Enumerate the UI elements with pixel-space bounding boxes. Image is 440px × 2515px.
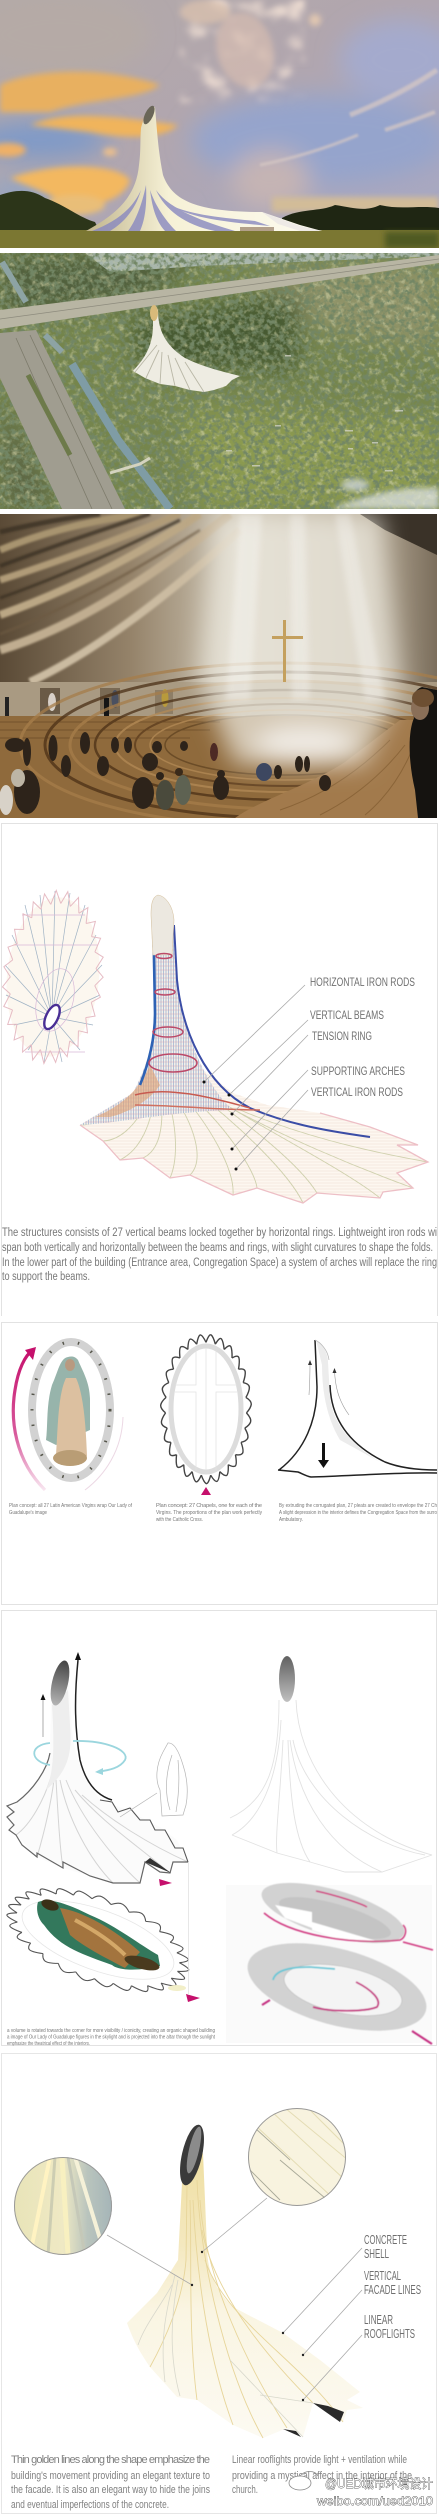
oculus (41, 1003, 63, 1031)
virgin plan perspective (0, 1862, 204, 2014)
right trees (282, 205, 439, 232)
pink arrow (13, 1350, 45, 1490)
grey crease lines (138, 2275, 313, 2437)
light streaks (226, 514, 385, 700)
corrugated outline (160, 1333, 252, 1484)
weibo watermark: @UED城市环境设计 (325, 2476, 433, 2491)
oculus (47, 1659, 73, 1707)
caption: Ambulatory. (279, 1517, 303, 1523)
wall niches (40, 688, 173, 714)
leader dots (191, 2251, 304, 2401)
pink triangle (201, 1487, 211, 1495)
black curve arrow (76, 1660, 112, 1800)
pink flag (159, 1879, 172, 1886)
caption: emphasize the theatrical effect of the interiors. (7, 2041, 90, 2047)
panel: exterior sunset photo (0, 0, 440, 248)
panel: form and plan diagrams (0, 1610, 437, 2048)
caption (7, 2028, 215, 2047)
arrow heads (308, 1360, 336, 1373)
head (40, 1897, 60, 1913)
up arrows (309, 1362, 349, 1415)
distant buildings (272, 197, 439, 212)
yellow glow (168, 1985, 186, 1991)
small head (40, 1694, 46, 1700)
wooden ramp (235, 720, 420, 818)
tower folds (230, 1700, 432, 1872)
caption: with the Catholic Cross. (155, 1517, 203, 1523)
blue route (273, 1967, 335, 1980)
virgin outline sketch (120, 1743, 187, 1817)
under shadow (145, 1858, 171, 1873)
church aerial (133, 306, 240, 392)
caption: a volume is rotated towards the corner for more visibility / iconicity, creating an organic shaped building (7, 2028, 215, 2034)
right profile (330, 1385, 437, 1470)
inner court (275, 1889, 395, 1947)
structure paragraph: to support the beams. (2, 1271, 90, 1283)
right description (232, 2454, 412, 2496)
roof oval (256, 1870, 410, 1956)
rim (248, 2108, 346, 2206)
panel: plan concept diagrams (2, 1322, 438, 1604)
ceiling shadows (0, 514, 200, 634)
tree canopy (0, 253, 439, 509)
ceiling folds (0, 514, 240, 682)
blue sky areas (0, 0, 440, 210)
ring head (95, 1768, 103, 1775)
pink route (264, 1891, 433, 1950)
left description: building's movement providing an elegant texture to (11, 2470, 210, 2482)
weibo watermark (316, 2476, 433, 2508)
caption: Plan concept: all 27 Latin American Virgins wrap Our Lady of (9, 1503, 132, 1509)
leader lines (107, 2198, 362, 2400)
oculus highlights (184, 2125, 204, 2175)
structure labels (310, 975, 415, 1099)
inner oval (280, 1955, 406, 2025)
disc (14, 2157, 112, 2255)
structure wireframe (80, 895, 428, 1203)
caption: a image of Our Lady of Guadalupe figures in the skylight and is projected into the altar through the sunlight (7, 2034, 215, 2040)
structure labels: VERTICAL IRON RODS (311, 1085, 403, 1099)
caption (9, 1503, 132, 1516)
panel frame (2, 1610, 436, 2046)
panel: aerial site photo (0, 253, 439, 509)
material labels: SHELL (364, 2247, 389, 2261)
church folds (92, 185, 270, 231)
detail circle left (14, 2157, 112, 2255)
left description: Thin golden lines along the shape emphasize the (11, 2454, 210, 2466)
highway (0, 330, 125, 509)
disc folds (30, 2157, 105, 2255)
ground field (0, 253, 439, 509)
structure paragraph (2, 1227, 437, 1283)
rim (14, 2158, 112, 2254)
fan ribs (80, 1075, 428, 1203)
far haze (85, 253, 439, 272)
upper zigzag (100, 1800, 188, 1862)
pink flag (186, 1994, 200, 2002)
extrusion concept (278, 1340, 437, 1523)
ground (0, 230, 439, 248)
left description (11, 2454, 210, 2511)
cross (175, 1348, 237, 1470)
left description: and eventual imperfections of the concrete. (11, 2499, 169, 2511)
flare colour (95, 1065, 160, 1117)
roof plan (256, 1870, 433, 1956)
ceiling (0, 514, 437, 682)
church oculus (143, 106, 155, 124)
floor plan (238, 1926, 436, 2048)
dark upper right (360, 514, 437, 555)
forest texture (0, 253, 439, 509)
panel: interior worship photo (0, 514, 440, 827)
structure labels: VERTICAL BEAMS (310, 1008, 384, 1022)
orange clouds (0, 72, 178, 215)
fan surface (80, 1060, 428, 1203)
dots and leader lines (204, 985, 308, 1169)
disc lines (255, 2108, 350, 2200)
weibo logo (289, 2472, 318, 2490)
caption: Plan concept: 27 Chapels, one for each of the (156, 1503, 262, 1509)
virgin plan concept (9, 1342, 132, 1516)
detail circle right (248, 2108, 350, 2206)
tower mesh (80, 895, 233, 1125)
dark creases (250, 2128, 325, 2200)
rotation ring (34, 1741, 126, 1772)
inner oval (171, 1346, 241, 1472)
angel at foot (123, 1953, 161, 1973)
tower body (127, 2153, 363, 2438)
tower folds (16, 1770, 188, 1883)
panel: materials diagram (2, 2054, 436, 2514)
faint white tower (230, 1656, 432, 1872)
cross (272, 620, 303, 682)
regional tone (0, 253, 439, 509)
pink entries (262, 2000, 432, 2044)
church tip (150, 305, 158, 321)
chapels plan concept (155, 1333, 262, 1523)
median strip (28, 375, 70, 455)
mist corner (330, 479, 439, 509)
faint right background (226, 1885, 432, 2043)
material labels: CONCRETE (364, 2233, 407, 2247)
material labels: LINEAR (364, 2313, 393, 2327)
green mantle (37, 1900, 160, 1970)
tower body (7, 1663, 188, 1883)
cream tower (127, 2123, 363, 2438)
supporting rings (135, 954, 260, 1110)
small crossing (110, 458, 150, 473)
left profile (279, 1340, 317, 1470)
rosette horizontal rods (14, 915, 98, 1052)
back wall (0, 682, 437, 718)
caption: Virgins. The proportions of the plan work perfectly (156, 1510, 262, 1516)
shaft shade (46, 1690, 71, 1790)
wall figures (5, 689, 168, 722)
oculus (279, 1656, 295, 1702)
left trees (0, 191, 100, 232)
material labels: VERTICAL (364, 2269, 401, 2283)
overpass road (0, 255, 439, 329)
dark oculus (175, 2123, 209, 2187)
rosette outline (0, 884, 113, 1070)
leader dots (202, 1080, 238, 1170)
outer oval (238, 1926, 436, 2048)
structure labels: SUPPORTING ARCHES (311, 1064, 405, 1078)
tower top (151, 895, 174, 955)
ring figures (32, 1342, 110, 1478)
weibo watermark: weibo.com/ued2010 (316, 2494, 433, 2508)
material labels (364, 2233, 421, 2341)
parked cars (226, 355, 403, 472)
fan zigzag edge (80, 1113, 428, 1203)
entrance shadow (240, 227, 274, 231)
virgin figure (46, 1356, 90, 1466)
shell shading (316, 1340, 380, 1462)
oval plan (0, 1866, 204, 2014)
church shading lines (135, 345, 204, 392)
caption (155, 1503, 262, 1523)
pale cloud wisps (180, 0, 321, 94)
link line (188, 1862, 190, 1995)
panel frame (2, 2054, 436, 2514)
panel: structure diagram (0, 824, 438, 1316)
gold lines (150, 2180, 343, 2438)
congregation (0, 732, 331, 815)
ground profile (278, 1470, 437, 1477)
light shaft (200, 514, 400, 765)
canal (72, 364, 170, 509)
panel frame (2, 824, 438, 1316)
left description: the facade. It is also an elegant way to hide the joins (11, 2484, 210, 2496)
under shadow (283, 2403, 344, 2437)
grey ring (32, 1342, 110, 1478)
plan rosette (0, 884, 113, 1070)
faint arc (85, 1417, 123, 1490)
top outline (315, 1340, 329, 1360)
light cloud streaks (260, 70, 437, 165)
woman in foreground (410, 687, 437, 818)
church tower (86, 107, 322, 231)
white cut (275, 1905, 380, 1942)
entrance wing (262, 212, 322, 231)
down arrow (318, 1443, 329, 1468)
disc (248, 2108, 346, 2206)
small arrow (42, 1697, 44, 1737)
peach clouds upper right (180, 0, 305, 102)
zigzag edge (7, 1753, 188, 1883)
structure labels: TENSION RING (312, 1029, 372, 1043)
panel frame (2, 1322, 438, 1604)
inner ring (13, 1884, 183, 1996)
arrow head (25, 1347, 36, 1360)
stepped seating (0, 716, 437, 818)
sky (0, 0, 439, 248)
caption (279, 1503, 437, 1523)
upper canal (2, 262, 62, 352)
rosette rays (5, 891, 102, 1062)
tan robe (60, 1908, 140, 1968)
tower blue edges (140, 905, 155, 1085)
step lines (0, 663, 440, 827)
ramp grain (280, 740, 412, 815)
rosette fill (0, 893, 107, 1061)
rotated tower (7, 1652, 188, 1886)
curve head (75, 1652, 81, 1660)
robe highlight (75, 1920, 125, 1955)
caption: Guadalupe's image (9, 1510, 47, 1516)
right description: church. (232, 2484, 258, 2496)
pink route (313, 1982, 378, 2011)
